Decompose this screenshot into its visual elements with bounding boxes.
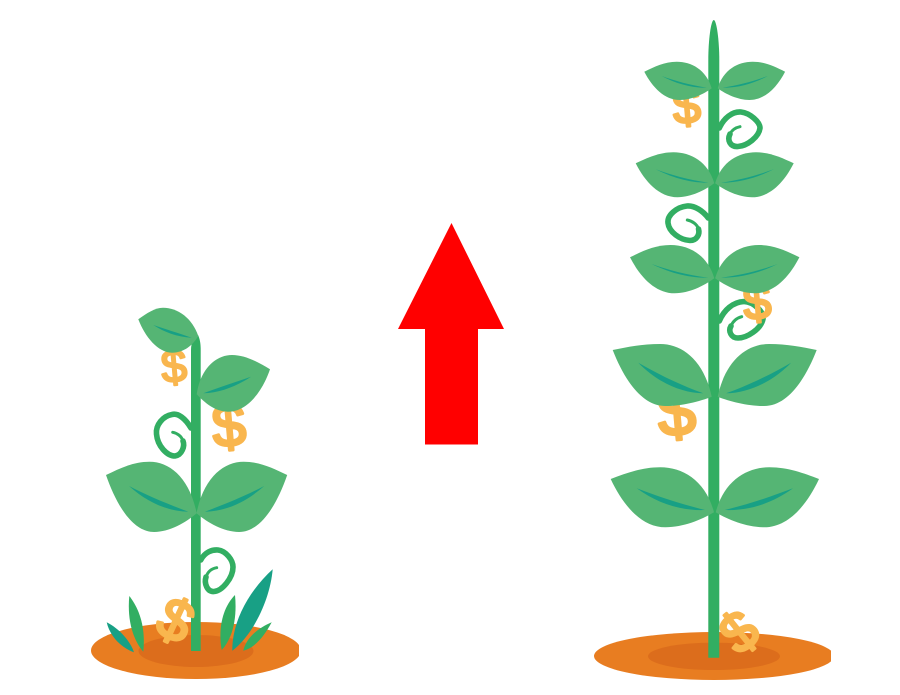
leaf: middle right bbox=[197, 355, 270, 412]
soil mound: small plant bbox=[91, 622, 301, 679]
leaf pair 5 left bbox=[611, 467, 714, 527]
leaf pair 1 right bbox=[718, 62, 785, 100]
leaf: large left bbox=[106, 462, 197, 532]
illustration bbox=[91, 20, 831, 680]
leaf pair 3 left bbox=[630, 245, 714, 293]
leaf pair 2 right bbox=[715, 152, 794, 197]
dollar sign: on soil: $ bbox=[707, 597, 771, 666]
red up arrow bbox=[398, 223, 504, 444]
leaf pair 3 right bbox=[715, 245, 799, 293]
grass tufts bbox=[107, 569, 273, 652]
stem: small plant bbox=[191, 335, 201, 651]
dollar sign: on soil: $ bbox=[147, 584, 204, 657]
leaf: top bbox=[138, 308, 198, 353]
soil mound: tall plant bbox=[594, 632, 834, 680]
tendril: lower bbox=[201, 550, 233, 592]
dollar sign: top: $ bbox=[670, 77, 703, 135]
tall plant bbox=[594, 20, 834, 680]
tendril: upper bbox=[156, 414, 191, 456]
dollar sign: upper left: $ bbox=[159, 339, 189, 393]
dollar sign: right: $ bbox=[741, 273, 773, 331]
small plant bbox=[91, 308, 301, 679]
leaf pair 4 left bbox=[613, 344, 712, 406]
leaf pair 2 left bbox=[636, 152, 714, 197]
leaf pair 5 right bbox=[716, 467, 819, 527]
leaf pair 1 left bbox=[644, 62, 712, 100]
leaf pair 4 right bbox=[718, 344, 817, 406]
leaf: large right bbox=[197, 462, 287, 532]
dollar sign: upper right: $ bbox=[209, 391, 248, 460]
tendril: middle left bbox=[668, 206, 708, 240]
dollar sign: lower left: $ bbox=[654, 373, 699, 452]
tendril: top right bbox=[719, 112, 760, 147]
stem: tall plant bbox=[708, 20, 719, 658]
tendril: lower right bbox=[719, 302, 763, 338]
